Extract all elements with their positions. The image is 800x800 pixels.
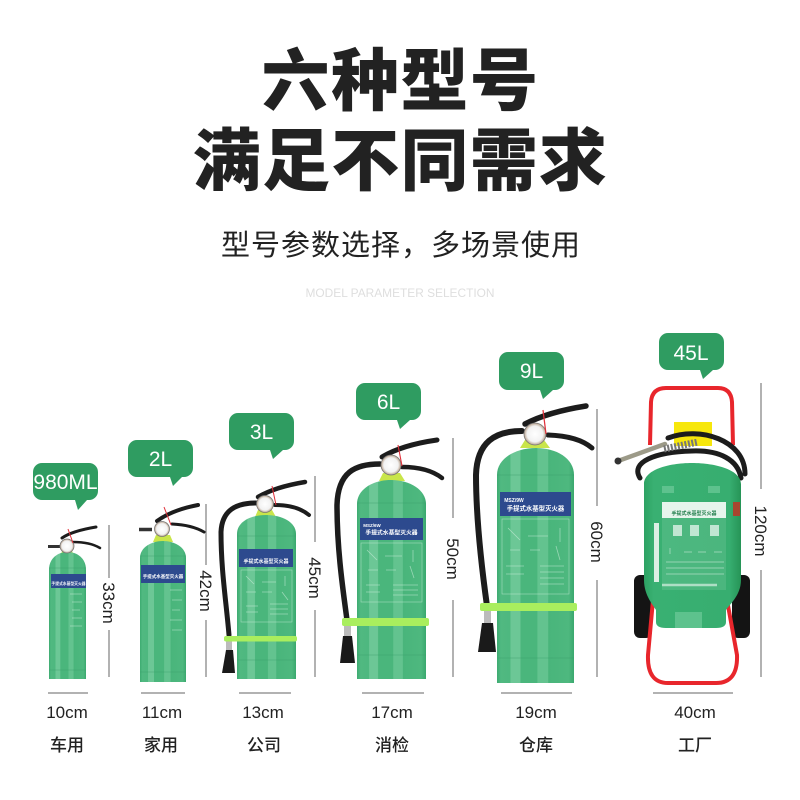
capacity bubble 3L (229, 413, 294, 459)
wheeled extinguisher 45L (614, 388, 750, 683)
red frame (648, 388, 737, 683)
wheels (634, 575, 750, 638)
extinguisher 6L: 手提式水基型灭火器 (365, 528, 418, 536)
extinguisher 3L: 手提式水基型灭火器 (243, 558, 289, 565)
instruction label (662, 502, 726, 590)
capacity bubble 6L (356, 383, 421, 429)
extinguisher 3L (221, 482, 309, 679)
english caption: MODEL PARAMETER SELECTION (306, 286, 494, 300)
height dimension 120cm: 120cm (751, 505, 770, 557)
model 3L (221, 413, 324, 755)
model 980ML (33, 463, 118, 755)
width dimension 40cm: 40cm (674, 703, 716, 722)
height dimension 33cm: 33cm (99, 582, 118, 624)
use label 家用: 家用 (144, 735, 178, 755)
width dimension 17cm (362, 693, 424, 722)
height dimension 60cm: 60cm (587, 521, 606, 563)
extinguisher 9L: MSZ/9W (504, 498, 524, 504)
tank (644, 463, 741, 628)
width dimension 11cm (141, 693, 185, 722)
width dimension 10cm (46, 693, 88, 722)
capacity bubble 45L (659, 333, 724, 379)
extinguisher 980ML (48, 527, 100, 679)
subtitle: 型号参数选择，多场景使用 (221, 229, 581, 262)
width dimension 11cm: 11cm (142, 703, 182, 722)
model 45L (614, 333, 770, 755)
instruction label: 手提式水基型灭火器 (671, 510, 717, 517)
width dimension 17cm: 17cm (371, 703, 413, 722)
width dimension 40cm (653, 693, 733, 722)
model 2L (128, 440, 215, 755)
use label 仓库: 仓库 (519, 736, 553, 755)
extinguisher 9L (476, 406, 592, 683)
extinguisher 6L (337, 440, 442, 679)
capacity bubble 9L (499, 352, 564, 399)
height dimension 50cm: 50cm (443, 538, 462, 580)
yellow sign (674, 422, 712, 446)
model 9L (476, 352, 606, 755)
red gauge box (733, 502, 740, 516)
capacity bubble 3L: 3L (250, 421, 273, 444)
model 6L (337, 383, 462, 755)
use label 消检: 消检 (375, 736, 409, 755)
capacity bubble 2L (128, 440, 193, 486)
capacity bubble 980ML (33, 463, 98, 510)
width dimension 19cm: 19cm (515, 703, 557, 722)
use label 工厂: 工厂 (678, 736, 712, 755)
capacity bubble 9L: 9L (520, 360, 543, 383)
use label 公司: 公司 (247, 736, 281, 755)
width dimension 13cm: 13cm (242, 703, 284, 722)
width dimension 10cm: 10cm (46, 703, 88, 722)
extinguisher 2L: 手提式水基型灭火器 (143, 573, 184, 580)
capacity bubble 45L: 45L (673, 342, 709, 365)
title (193, 44, 608, 200)
width dimension 13cm (239, 693, 291, 722)
nozzle (614, 442, 698, 464)
title: 六种型号 (261, 44, 540, 120)
capacity bubble 2L: 2L (149, 448, 172, 471)
hose coil (638, 434, 745, 478)
use label 车用: 车用 (50, 736, 84, 755)
height dimension 42cm: 42cm (196, 570, 215, 612)
capacity bubble 6L: 6L (377, 391, 400, 414)
height dimension 45cm: 45cm (305, 557, 324, 599)
tank highlights (662, 486, 720, 628)
width dimension 19cm (501, 693, 572, 722)
capacity bubble 980ML: 980ML (33, 471, 98, 494)
extinguisher 9L: 手提式水基型灭火器 (507, 504, 565, 512)
extinguisher 980ML: 手提式水基型灭火器 (51, 581, 86, 586)
white strip (654, 523, 659, 582)
title: 满足不同需求 (193, 124, 608, 200)
extinguisher 6L: MSZ/6W (363, 523, 382, 528)
extinguisher 2L (139, 505, 204, 682)
